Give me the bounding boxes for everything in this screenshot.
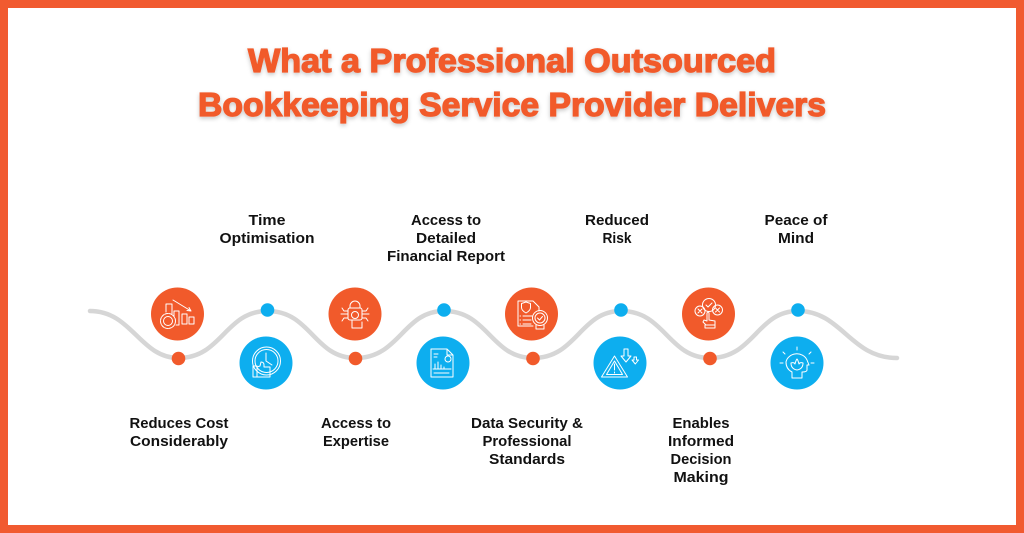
label: access to detailed financial report: Detailed	[416, 231, 476, 247]
label: enables informed decision making: Informed	[668, 434, 734, 450]
label: enables informed decision making	[668, 416, 734, 486]
label: reduced risk	[585, 213, 649, 247]
label: reduces cost considerably: Reduces Cost	[130, 416, 229, 432]
label: enables informed decision making: Enables	[672, 416, 730, 432]
label: peace of mind: Peace of	[764, 213, 828, 229]
icon: financial report	[416, 336, 470, 390]
label: reduced risk: Reduced	[585, 213, 649, 229]
label: peace of mind: Mind	[778, 231, 814, 247]
icon: secured document	[505, 288, 558, 340]
label: data security and professional standards: Data Security &	[471, 416, 584, 432]
label: access to detailed financial report	[387, 213, 505, 265]
label: time optimisation: Optimisation	[220, 231, 314, 247]
label: access to expertise: Access to	[321, 416, 391, 432]
title: Bookkeeping Service Provider Delivers	[198, 86, 826, 123]
title: What a Professional Outsourced	[248, 42, 776, 79]
timeline dots	[172, 303, 805, 365]
wavy timeline	[90, 311, 897, 358]
label: enables informed decision making: Decision	[670, 452, 732, 468]
label: reduced risk: Risk	[602, 231, 632, 247]
label: time optimisation	[220, 213, 314, 247]
label: data security and professional standards	[471, 416, 584, 468]
label: access to detailed financial report: Access to	[411, 213, 481, 229]
icon: risk warning	[594, 336, 646, 390]
title	[198, 42, 826, 123]
icon: clock with thumb	[240, 336, 292, 390]
label: peace of mind	[764, 213, 828, 247]
label: enables informed decision making: Making	[674, 470, 728, 486]
label: data security and professional standards: Standards	[489, 452, 565, 468]
label: data security and professional standards: Professional	[482, 434, 572, 450]
label: access to expertise	[321, 416, 391, 450]
icon: mindful head	[770, 336, 824, 390]
icon: decision making	[682, 288, 735, 340]
icon: cost reduction	[151, 288, 204, 340]
label: access to detailed financial report: Financial Report	[387, 249, 505, 265]
label: reduces cost considerably	[130, 416, 229, 450]
label: reduces cost considerably: Considerably	[130, 434, 228, 450]
label: time optimisation: Time	[248, 213, 286, 229]
label: access to expertise: Expertise	[323, 434, 389, 450]
icon: digital lock	[328, 288, 382, 340]
